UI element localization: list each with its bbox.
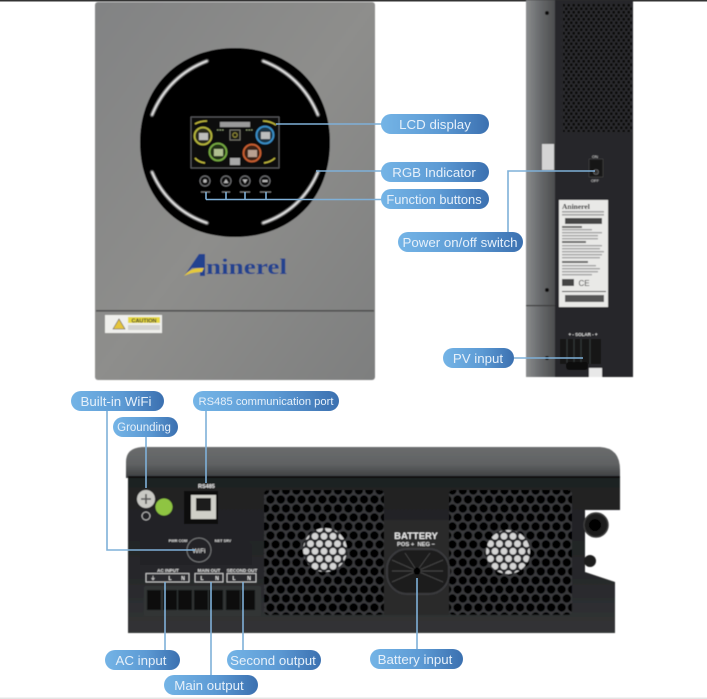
leader line: RGB indicator (316, 170, 382, 172)
label: Second output (227, 650, 321, 670)
terminal block: N (247, 576, 251, 582)
terminal block: L (232, 576, 236, 582)
LCD screen (191, 117, 279, 168)
spec label: Aninerel (562, 202, 590, 211)
left fan grille (264, 490, 384, 615)
PV terminals: + - SOLAR - + (568, 332, 598, 337)
leader line: main output (210, 582, 212, 675)
left fan (303, 528, 347, 572)
terminal block: N (181, 576, 185, 582)
spec label: CE (578, 279, 590, 288)
label: Grounding (113, 417, 178, 437)
label: RGB Indicator (381, 162, 489, 182)
caution label (105, 315, 162, 333)
leader line: WiFi (107, 411, 195, 550)
terminal block (144, 568, 261, 616)
side connector (584, 513, 608, 567)
label: Main output: Main output (174, 678, 244, 693)
brand logo: ninerel (206, 254, 287, 279)
function button icons (200, 176, 271, 192)
brand logo (184, 254, 287, 279)
label: Grounding: Grounding (117, 422, 171, 434)
label: Power on/off switch (398, 232, 523, 252)
PV terminals (560, 332, 602, 377)
WiFi module: NET SRV (215, 539, 232, 543)
panel: inverter side view (526, 0, 633, 377)
terminal block: N (215, 576, 219, 582)
power switch: ON (592, 154, 598, 159)
label: Battery input: Battery input (378, 652, 453, 667)
terminal block: MAIN OUT (198, 568, 221, 573)
label: AC input: AC input (116, 653, 167, 668)
leader line: AC input (164, 582, 166, 650)
battery port (384, 520, 449, 615)
label: Function buttons: Function buttons (386, 192, 482, 207)
grounding screw (137, 490, 172, 520)
label: Second output: Second output (230, 653, 316, 668)
panel: inverter bottom view (126, 447, 620, 633)
terminal block: L (168, 576, 172, 582)
right fan (486, 530, 530, 574)
right fan grille (449, 490, 572, 615)
leader line: RS485 (205, 411, 207, 483)
terminal block: AC INPUT (157, 568, 179, 573)
leader line: function buttons (206, 192, 382, 200)
RGB light arcs (152, 61, 318, 223)
panel: inverter front view (95, 2, 375, 380)
power switch (589, 154, 603, 183)
label: Built-in WiFi: Built-in WiFi (81, 394, 152, 409)
label: LCD display (381, 114, 489, 134)
battery port: POS + NEG − (397, 542, 436, 548)
display bezel (140, 48, 330, 237)
WiFi module (140, 528, 252, 565)
label: PV input (443, 348, 514, 368)
label: Main output (164, 675, 258, 695)
label: Battery input (370, 649, 463, 669)
label: Built-in WiFi (71, 391, 164, 411)
warning sticker (542, 144, 554, 170)
leader line: power switch (508, 171, 595, 232)
RS485 port: RS485 (198, 484, 215, 490)
side vent grille (563, 3, 632, 132)
label: Function buttons (381, 189, 489, 209)
terminal block: L (200, 576, 204, 582)
leader line: LCD display (276, 123, 382, 125)
label: LCD display: LCD display (399, 117, 471, 132)
label: RGB Indicator: RGB Indicator (392, 165, 476, 180)
label: RS485 communication port (193, 391, 339, 411)
label: PV input: PV input (453, 351, 503, 366)
leader line: PV input (514, 357, 583, 359)
terminal block: ⏚ (150, 575, 156, 582)
leader line: second output (242, 582, 244, 650)
caution label: CAUTION (131, 318, 157, 324)
spec label (559, 200, 608, 307)
label: AC input (105, 650, 180, 670)
label: Power on/off switch: Power on/off switch (402, 235, 518, 250)
battery port: BATTERY (394, 531, 439, 542)
leader line: battery input (416, 578, 418, 649)
WiFi module: PWR COM (169, 539, 187, 543)
label: RS485 communication port: RS485 communication port (199, 396, 334, 408)
terminal block: SECOND OUT (227, 568, 258, 573)
leader line: grounding (145, 437, 147, 488)
RS485 port (184, 484, 218, 524)
WiFi module: WiFi (192, 548, 206, 555)
power switch: OFF (591, 178, 600, 183)
